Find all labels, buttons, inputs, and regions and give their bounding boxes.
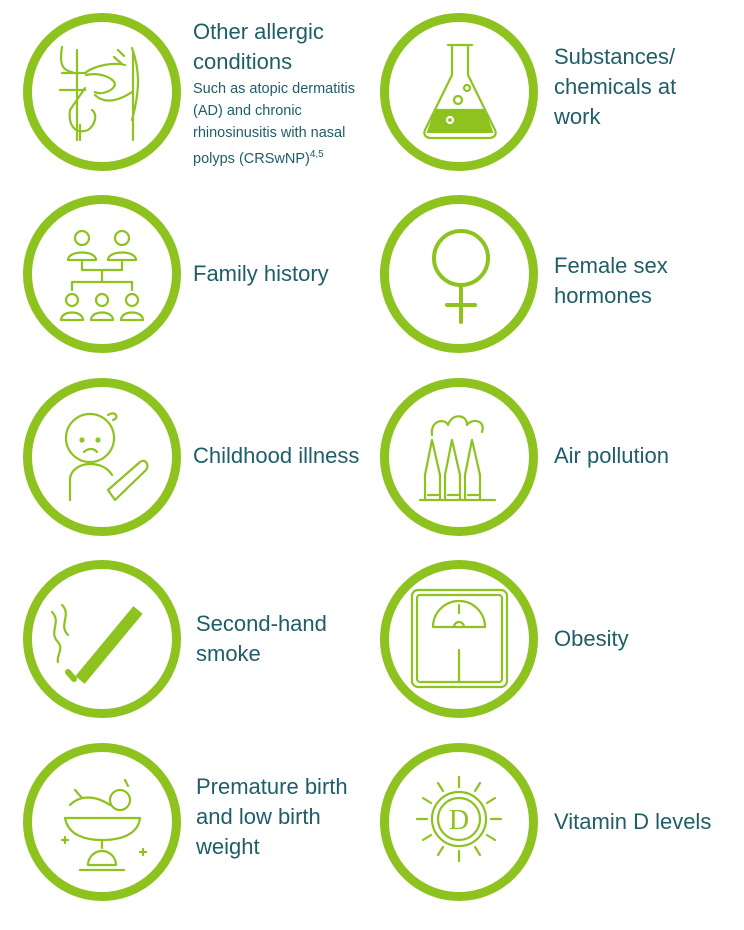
text: female sex hormones: Female sex xyxy=(554,253,668,278)
text: second-hand smoke: smoke xyxy=(196,641,261,666)
text: air pollution: Air pollution xyxy=(554,443,669,468)
text: other allergic conditions: Other allergic xyxy=(193,19,324,44)
text: substances: chemicals at xyxy=(554,74,676,99)
text: vitamin D: Vitamin D levels xyxy=(554,809,711,834)
text: other allergic conditions: (AD) and chronic xyxy=(193,103,302,119)
text: premature birth: weight xyxy=(196,834,260,859)
icon: scale xyxy=(384,564,534,714)
icon: family tree xyxy=(28,200,176,348)
icon: flask xyxy=(384,18,534,166)
icon: vitamin D sun: D xyxy=(449,805,469,836)
text: premature birth: and low birth xyxy=(196,804,321,829)
icon: female symbol xyxy=(384,200,534,348)
text: other allergic conditions: Such as atopic dermatitis xyxy=(193,81,355,97)
icon: sick child xyxy=(28,382,176,532)
text: substances: work xyxy=(554,104,600,129)
text: second-hand smoke: Second-hand xyxy=(196,611,327,636)
text: other allergic conditions: rhinosinusitis with nasal xyxy=(193,125,345,141)
text: other allergic conditions: conditions xyxy=(193,49,292,74)
text: family history: Family history xyxy=(193,261,329,286)
text: second-hand smoke xyxy=(196,611,327,666)
icon: baby on scale xyxy=(28,748,176,896)
text: premature birth xyxy=(196,774,348,859)
icon: factory xyxy=(384,382,534,532)
text: other allergic conditions xyxy=(193,19,355,167)
text: childhood illness: Childhood illness xyxy=(193,443,359,468)
text: premature birth: Premature birth xyxy=(196,774,348,799)
icon: other allergic conditions xyxy=(28,18,176,166)
text: substances: Substances/ xyxy=(554,44,675,69)
text: female sex hormones: hormones xyxy=(554,283,652,308)
text: obesity: Obesity xyxy=(554,626,629,651)
icon: vitamin D sun xyxy=(384,748,534,896)
text: other allergic conditions: polyps (CRSwNP)4,5 xyxy=(193,149,324,167)
text: female sex hormones xyxy=(554,253,668,308)
text: substances xyxy=(554,44,676,129)
icon: cigarette xyxy=(28,564,176,714)
